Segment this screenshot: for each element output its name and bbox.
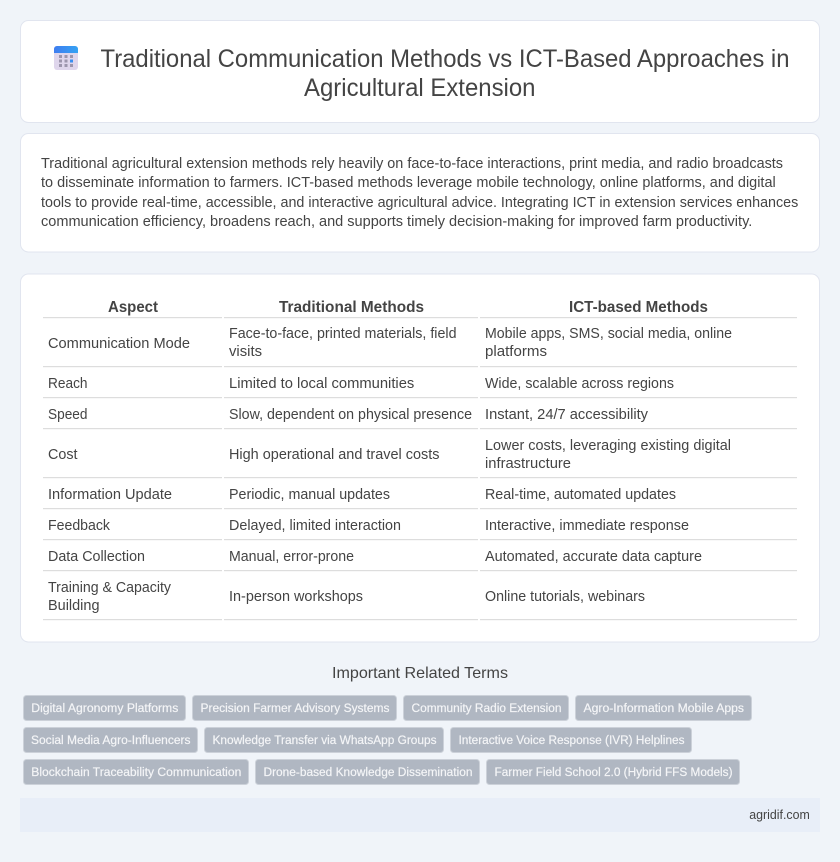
row: cost: High operational and travel costs [229, 447, 440, 463]
icon: calendar [54, 46, 78, 70]
row: cost: infrastructure [485, 456, 571, 472]
row: cost: Lower costs, leveraging existing digital [485, 438, 731, 454]
footer [20, 798, 820, 832]
row: data collection: Manual, error-prone [229, 549, 354, 565]
row: communication mode: Mobile apps, SMS, social media, online [485, 326, 732, 342]
tag [24, 760, 248, 784]
row: information update: Information Update [48, 487, 172, 503]
footer: agridif.com [749, 808, 810, 822]
tag: Community Radio Extension [412, 701, 562, 715]
row: cost: Cost [48, 447, 78, 463]
tag: Digital Agronomy Platforms [31, 701, 178, 715]
text block: description: Traditional agricultural extension methods rely heavily on face-to-face interactions, print media, and radio broadcasts [41, 156, 783, 172]
row: data collection: Automated, accurate data capture [485, 549, 702, 565]
tag: Precision Farmer Advisory Systems [200, 701, 390, 715]
tag: Blockchain Traceability Communication [31, 765, 241, 779]
text block: description: communication efficiency, broadens reach, and supports timely decision-making for improved farm productivity. [41, 214, 752, 230]
row: communication mode [48, 326, 732, 360]
tag [192, 696, 396, 720]
tag [486, 760, 740, 784]
text block: description [41, 156, 798, 230]
row: feedback [48, 518, 689, 534]
row: data collection [48, 549, 702, 565]
table header: ICT-based Methods [569, 299, 708, 316]
tag: Interactive Voice Response (IVR) Helplines [458, 733, 684, 747]
heading: related terms: Important Related Terms [332, 665, 508, 682]
table header [108, 299, 708, 316]
row: reach: Reach [48, 376, 88, 392]
tag [24, 696, 186, 720]
tag [204, 728, 444, 752]
tag: Social Media Agro-Influencers [31, 733, 190, 747]
text block: description: tools to provide real-time, accessible, and interactive agricultural advice. Integrating ICT in extension services enhances [41, 195, 798, 211]
row: speed: Slow, dependent on physical presence [229, 407, 472, 423]
tag: Agro-Information Mobile Apps [584, 701, 744, 715]
tag [576, 696, 752, 720]
title: Traditional Communication Methods vs ICT-Based Approaches in [100, 45, 790, 73]
row: reach: Limited to local communities [229, 376, 414, 392]
title: Agricultural Extension [304, 74, 536, 102]
tag [404, 696, 568, 720]
tags: related terms [24, 696, 752, 784]
tag: Drone-based Knowledge Dissemination [264, 765, 472, 779]
row: reach [48, 376, 674, 392]
row: training and capacity building: Online tutorials, webinars [485, 589, 645, 605]
row: speed: Speed [48, 407, 88, 423]
row: communication mode: visits [229, 344, 262, 360]
row: speed [48, 407, 649, 423]
text block: description: to disseminate information to farmers. ICT-based methods leverage mobile technology, online platforms, and digital [41, 175, 776, 191]
row: information update: Periodic, manual updates [229, 487, 390, 503]
table header: Aspect [108, 299, 158, 316]
row: training and capacity building: Building [48, 598, 100, 614]
row: communication mode: Communication Mode [48, 336, 190, 352]
table header: Traditional Methods [279, 299, 424, 316]
row: feedback: Feedback [48, 518, 111, 534]
row: cost [48, 438, 731, 472]
row: training and capacity building: Training & Capacity [48, 580, 172, 596]
row: data collection: Data Collection [48, 549, 145, 565]
panel: description [20, 134, 820, 252]
panel: title card [20, 20, 820, 122]
row: training and capacity building [48, 580, 645, 614]
row: speed: Instant, 24/7 accessibility [485, 407, 649, 423]
title [100, 45, 790, 102]
tag: Farmer Field School 2.0 (Hybrid FFS Models) [494, 765, 732, 779]
row: communication mode: Face-to-face, printed materials, field [229, 326, 456, 342]
row: communication mode: platforms [485, 344, 547, 360]
panel: comparison table [20, 274, 820, 642]
row: reach: Wide, scalable across regions [485, 376, 674, 392]
row: information update: Real-time, automated updates [485, 487, 676, 503]
tag [256, 760, 480, 784]
row: feedback: Delayed, limited interaction [229, 518, 401, 534]
row: feedback: Interactive, immediate response [485, 518, 689, 534]
row: training and capacity building: In-person workshops [229, 589, 363, 605]
tag: Knowledge Transfer via WhatsApp Groups [212, 733, 436, 747]
tag [450, 728, 692, 752]
row: information update [48, 487, 676, 503]
tag [24, 728, 198, 752]
